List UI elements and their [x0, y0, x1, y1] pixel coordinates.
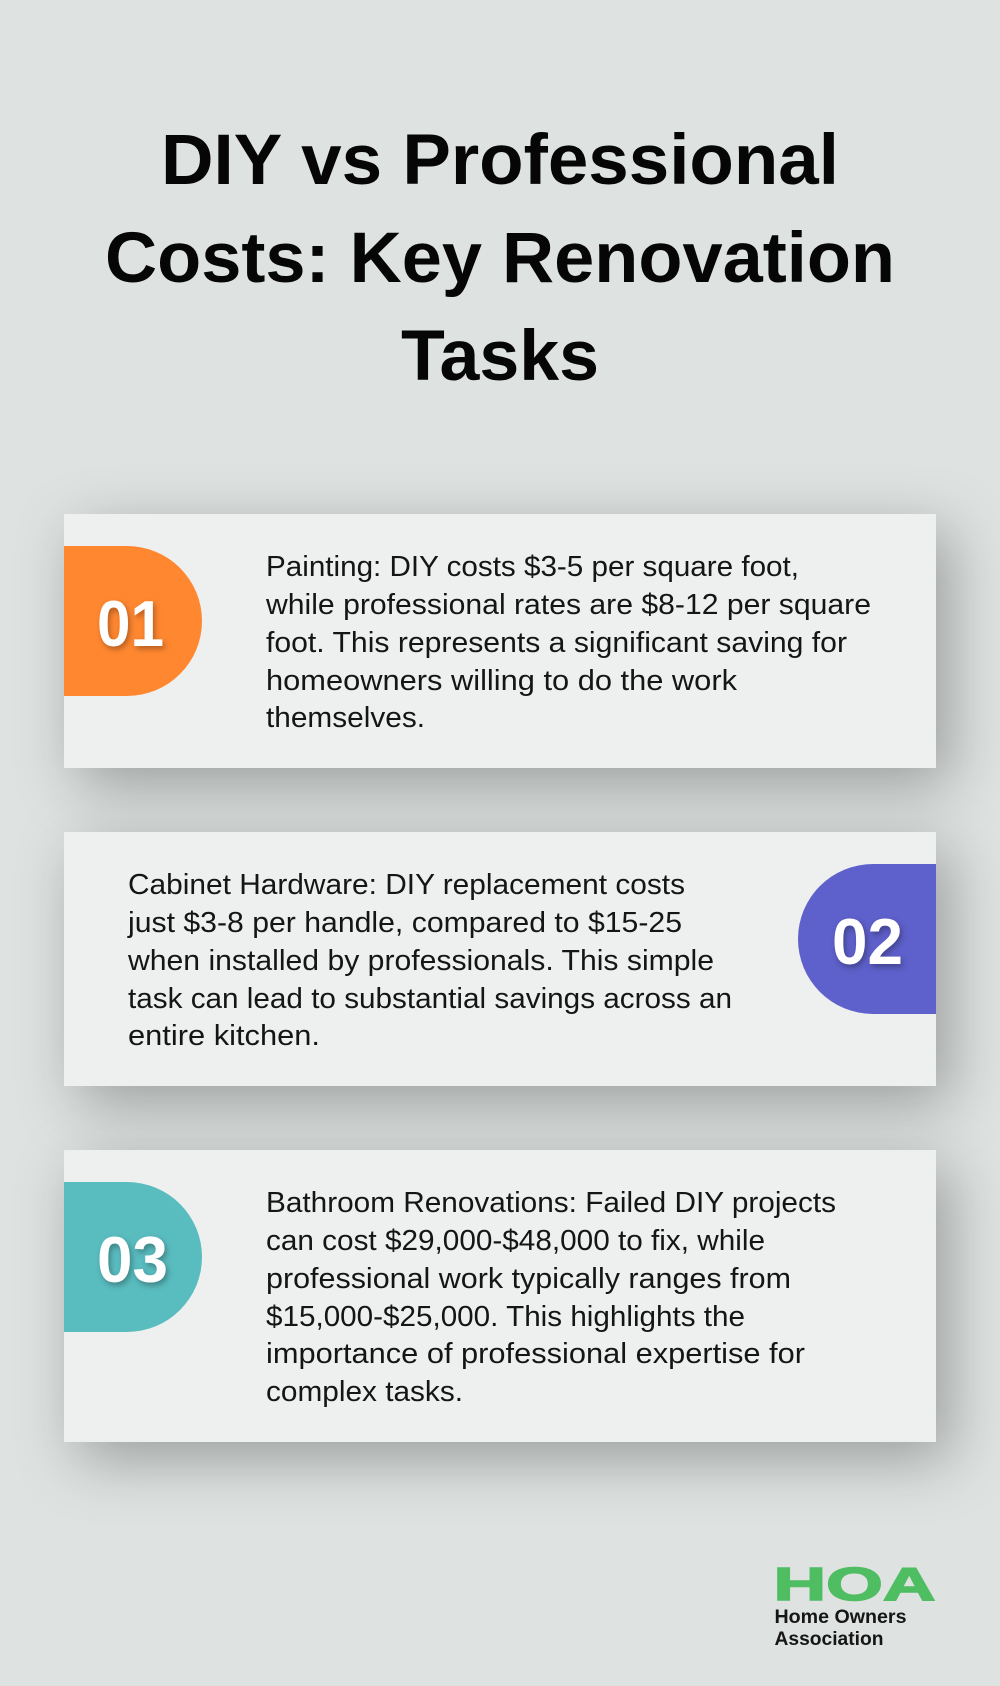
text: cabinet hardware: Cabinet Hardware: DIY replacement costs [128, 869, 685, 901]
card background [64, 514, 936, 768]
text: bathroom renovations: $15,000-$25,000. This highlights the [266, 1301, 745, 1333]
card background [64, 832, 936, 1086]
badge 03 [64, 1182, 202, 1332]
logo: HOA Home Owners Association: Association [774, 1629, 884, 1650]
logo: HOA Home Owners Association [774, 1558, 936, 1650]
badge 01: 01 [97, 587, 164, 660]
text: painting: while professional rates are $8-12 per square [265, 589, 871, 621]
badge 03: 03 [97, 1223, 168, 1296]
title: DIY vs Professional [161, 120, 839, 200]
panel: cabinet hardware [64, 832, 936, 1086]
card background [64, 1150, 936, 1442]
text: cabinet hardware: task can lead to substantial savings across an [128, 983, 732, 1015]
title: Tasks [401, 316, 599, 396]
text: painting: foot. This represents a significant saving for [266, 627, 848, 659]
text: painting: Painting: DIY costs $3-5 per square foot, [266, 551, 799, 583]
panel: painting [64, 514, 936, 768]
text: painting: themselves. [266, 702, 425, 734]
title [105, 120, 895, 396]
text: cabinet hardware: just $3-8 per handle, compared to $15-25 [127, 907, 682, 939]
panel: bathroom renovations [64, 1150, 936, 1442]
text: bathroom renovations: professional work typically ranges from [266, 1263, 791, 1295]
logo: HOA Home Owners Association: HOA [774, 1558, 936, 1610]
title: Costs: Key Renovation [105, 218, 895, 298]
text: bathroom renovations [266, 1187, 836, 1408]
text: bathroom renovations: can cost $29,000-$48,000 to fix, while [266, 1225, 765, 1257]
text: bathroom renovations: Bathroom Renovations: Failed DIY projects [266, 1187, 836, 1219]
badge 01 [64, 546, 202, 696]
badge 02: 02 [832, 905, 903, 978]
logo: HOA Home Owners Association: Home Owners [774, 1607, 906, 1628]
text: cabinet hardware: entire kitchen. [128, 1020, 320, 1052]
text: painting: homeowners willing to do the work [266, 665, 738, 697]
text: cabinet hardware: when installed by professionals. This simple [127, 945, 714, 977]
text: bathroom renovations: importance of professional expertise for [266, 1338, 806, 1370]
text: cabinet hardware [127, 869, 732, 1052]
badge 02 [798, 864, 936, 1014]
text: bathroom renovations: complex tasks. [266, 1376, 463, 1408]
text: painting [265, 551, 871, 734]
